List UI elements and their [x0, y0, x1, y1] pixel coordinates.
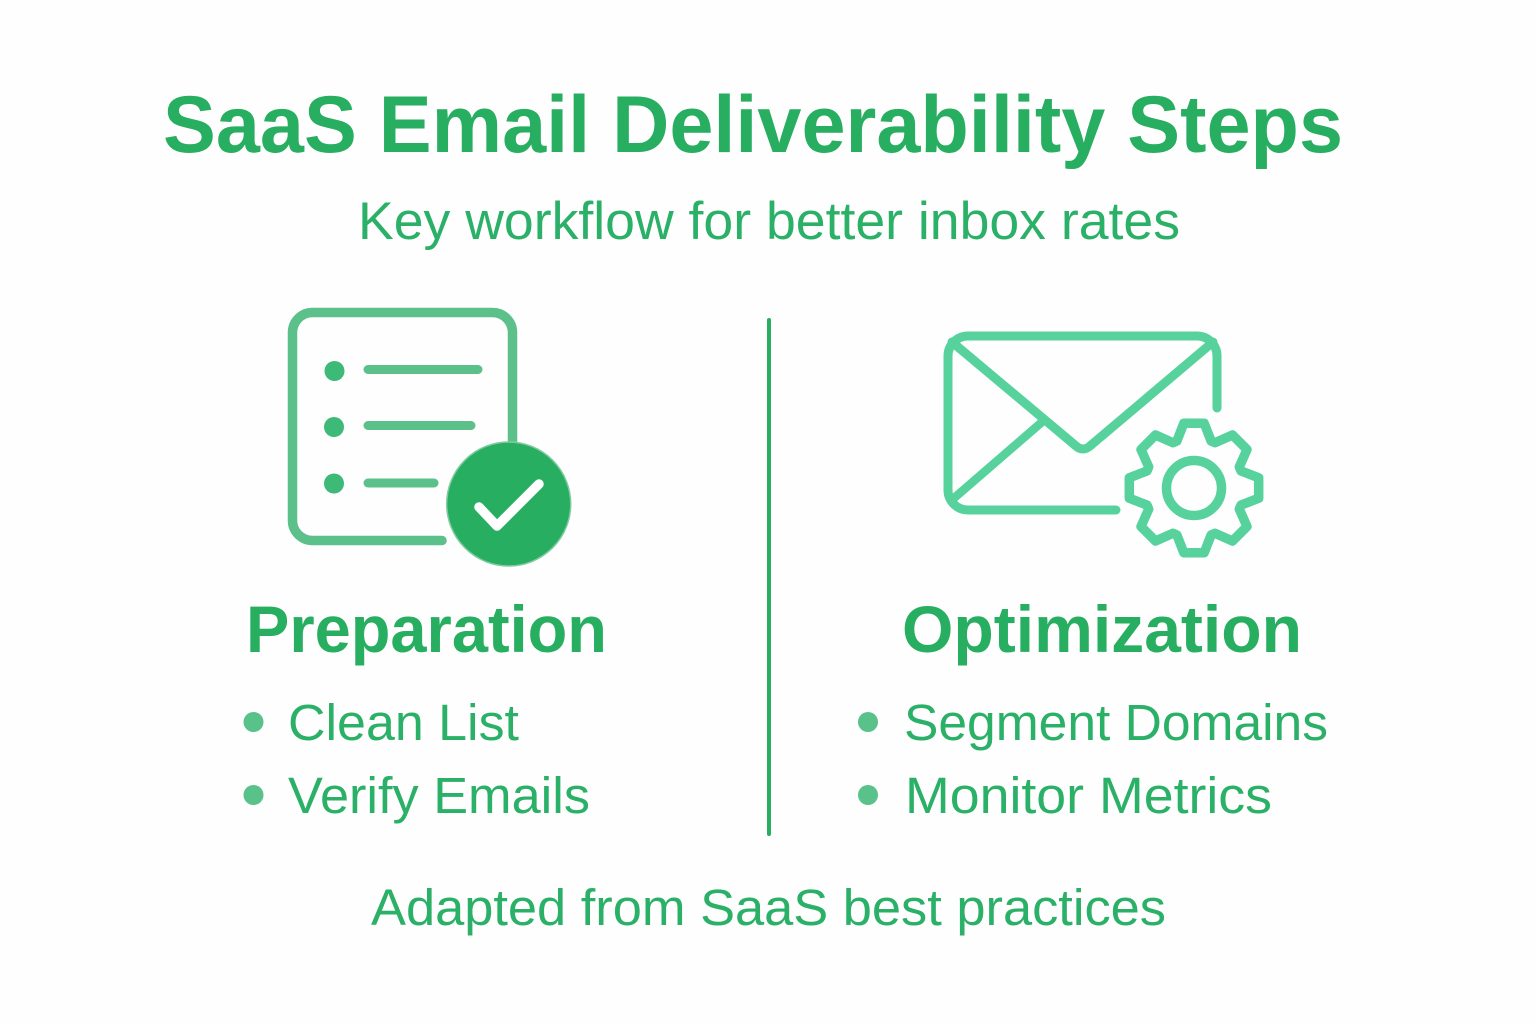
envelope lower fold	[953, 422, 1042, 499]
envelope outline	[948, 336, 1217, 510]
heading: preparation: Preparation	[246, 592, 607, 666]
checklist page outline	[292, 312, 512, 540]
subtitle: Key workflow for better inbox rates	[358, 192, 1180, 251]
heading: optimization: Optimization	[902, 592, 1302, 666]
footer note: Adapted from SaaS best practices	[371, 879, 1166, 936]
panel: optimization	[858, 592, 1328, 824]
icon: envelope with gear	[948, 336, 1259, 553]
icon: checklist with check badge	[292, 312, 571, 566]
divider	[767, 318, 771, 836]
envelope flap	[952, 342, 1213, 449]
check badge	[447, 442, 571, 566]
list item: segment domains: Segment Domains	[904, 694, 1328, 751]
list item: verify emails: Verify Emails	[288, 767, 590, 824]
checklist rows	[324, 361, 344, 494]
check mark	[479, 484, 539, 526]
list item: clean list: Clean List	[288, 694, 519, 751]
list item: monitor metrics: Monitor Metrics	[905, 767, 1272, 824]
panel: preparation	[244, 592, 607, 824]
title: SaaS Email Deliverability Steps	[163, 80, 1343, 170]
gear	[1129, 423, 1259, 553]
